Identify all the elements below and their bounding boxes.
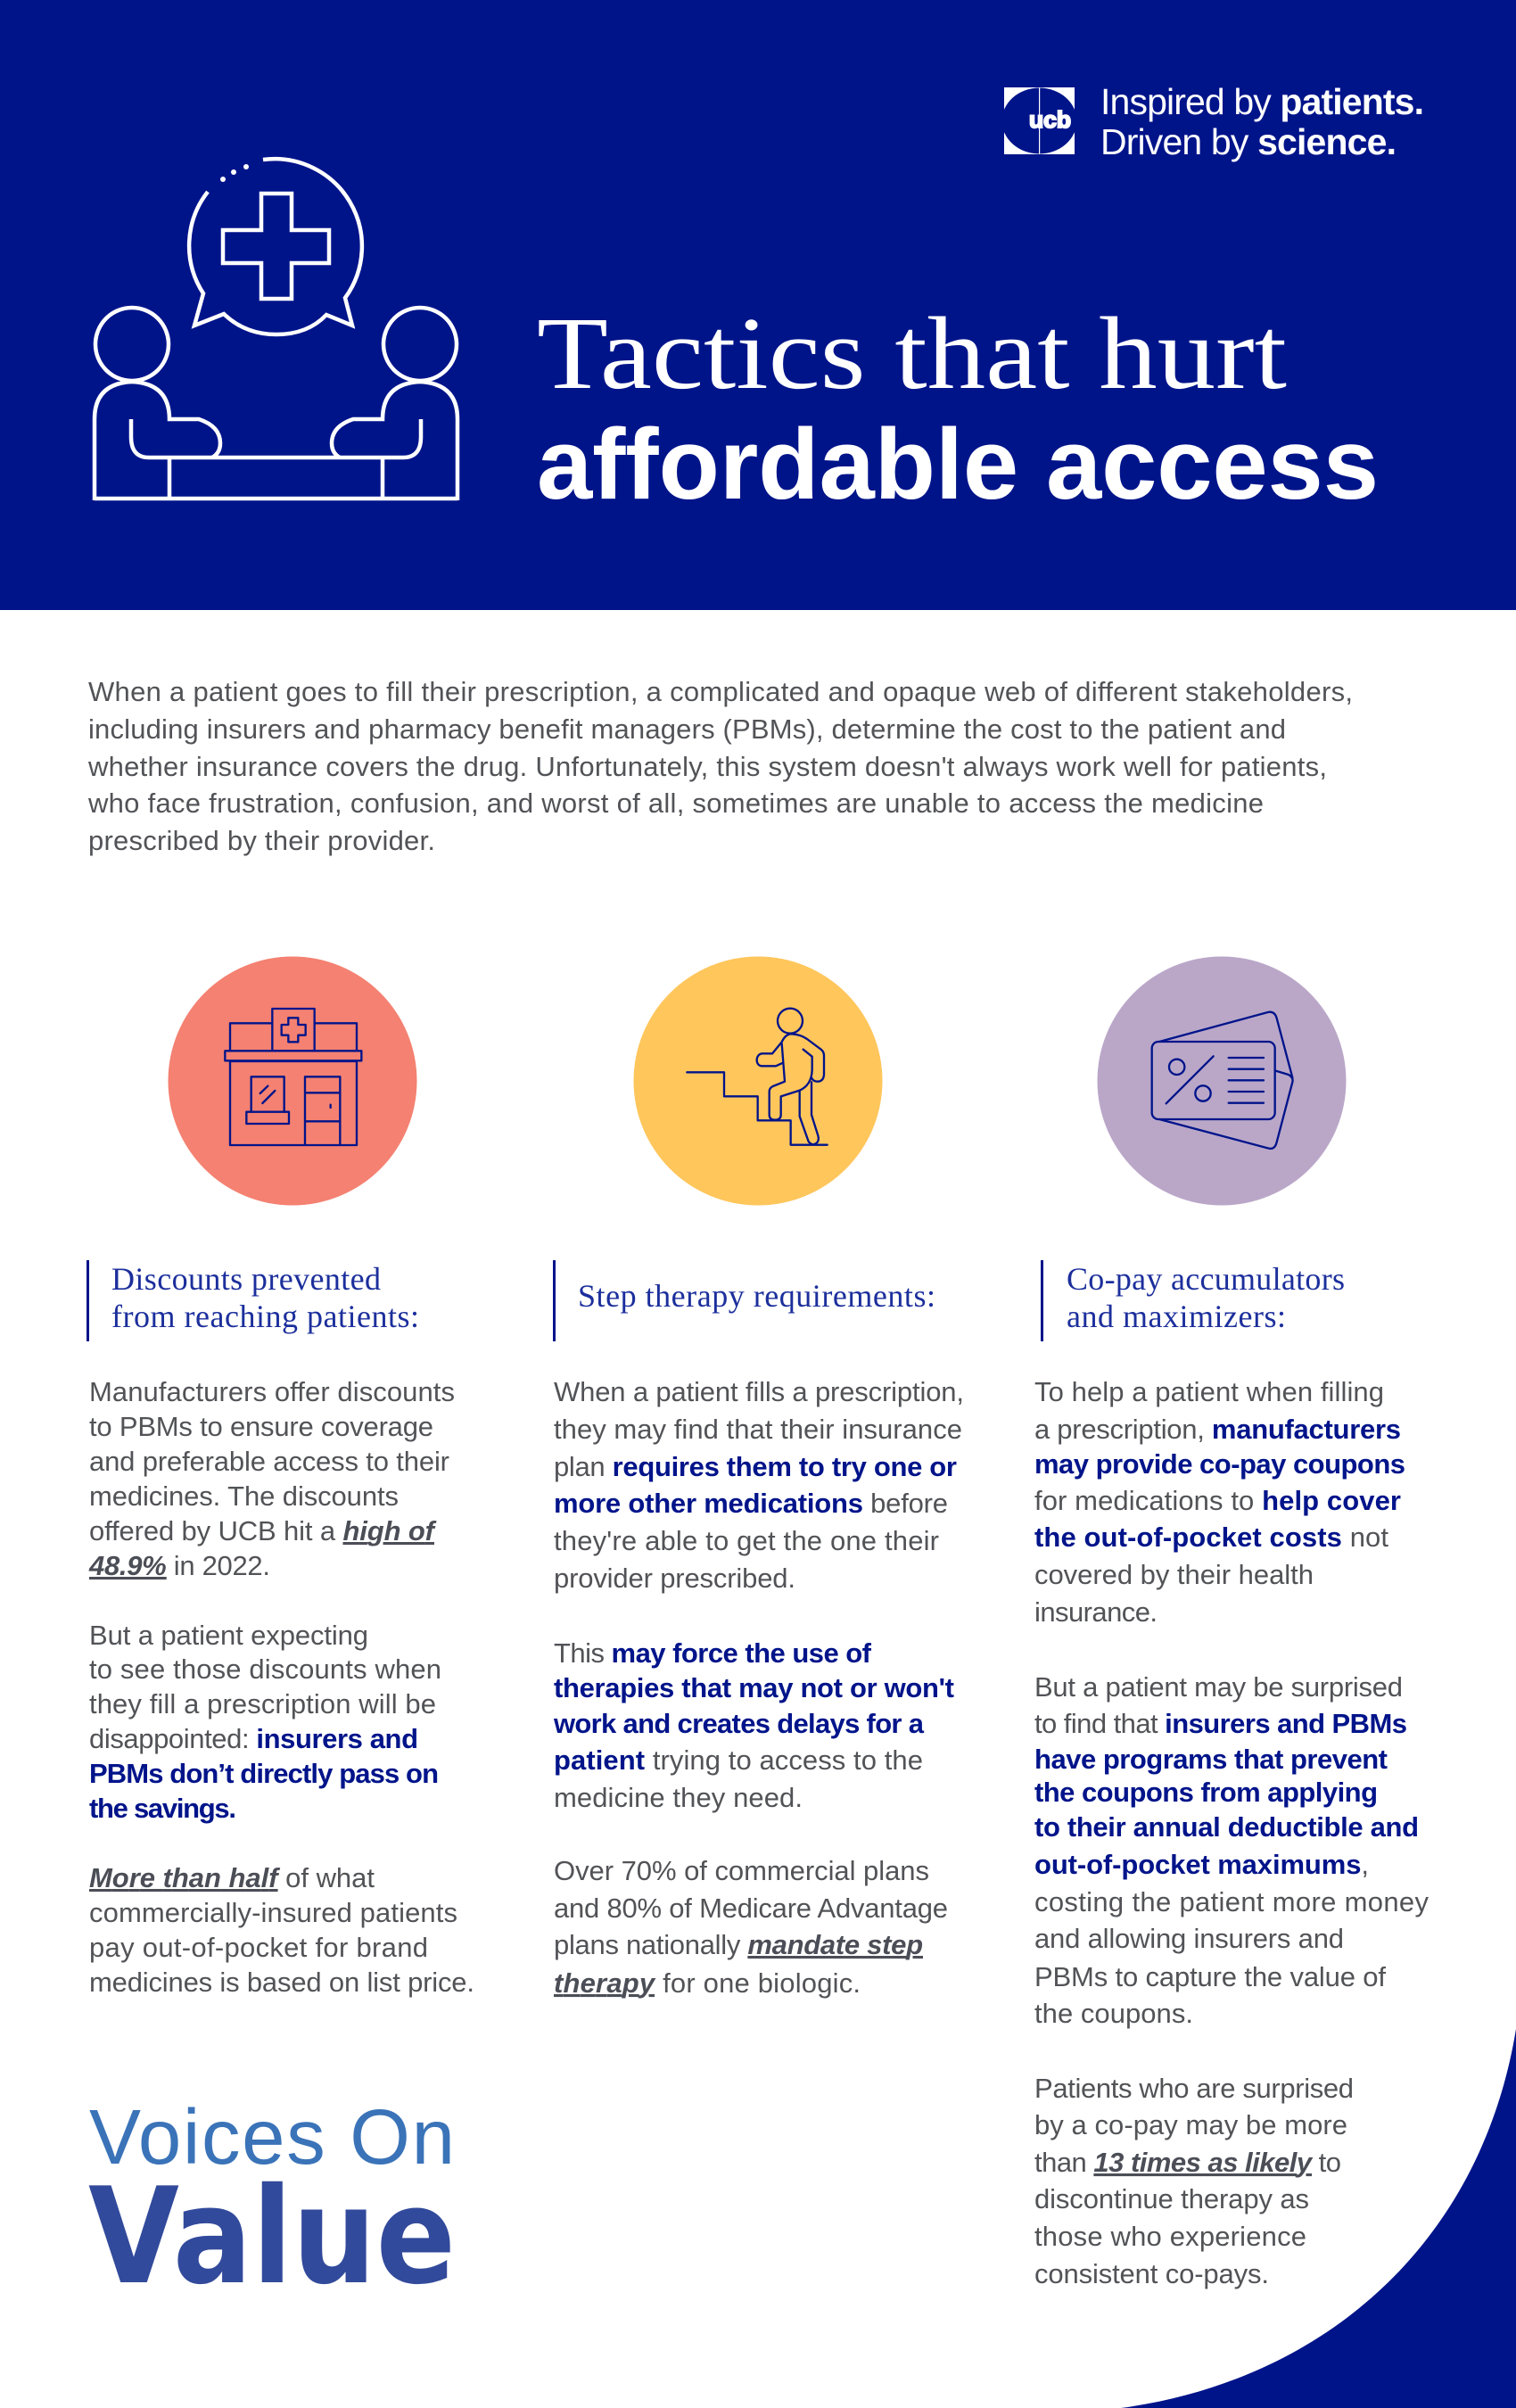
column 2 text: step therapy: therapies that may not or won't <box>554 1672 954 1703</box>
column 3 text: co-pay accumulators: and allowing insurers and <box>1034 1923 1344 1954</box>
column 3 text: co-pay accumulators: have programs that prevent <box>1034 1744 1388 1775</box>
column 2 text: step therapy: they're able to get the one their <box>554 1525 939 1556</box>
column 3 text: co-pay accumulators: by a co-pay may be more <box>1034 2109 1347 2140</box>
column 1 text: discounts: pay out-of-pocket for brand <box>89 1932 428 1963</box>
logo: UCB <box>1002 87 1077 154</box>
column 1 text: discounts: disappointed: insurers and <box>89 1723 418 1754</box>
tagline <box>1100 81 1424 162</box>
column 2 text: step therapy: therapy for one biologic. <box>554 1967 861 1999</box>
column 1 text: discounts <box>88 1376 474 1998</box>
title <box>537 297 1379 520</box>
column 2 text: step therapy: they may find that their insurance <box>554 1414 962 1445</box>
column 3 text: co-pay accumulators: to their annual deductible and <box>1034 1811 1419 1843</box>
icon: pharmacy on coral circle <box>168 956 417 1206</box>
column 3 text: co-pay accumulators: may provide co-pay coupons <box>1034 1448 1405 1480</box>
intro paragraph <box>87 676 1353 856</box>
column 2 text: step therapy: plans nationally mandate step <box>554 1929 923 1960</box>
column 1 text: discounts: and preferable access to their <box>89 1446 449 1477</box>
intro paragraph: including insurers and pharmacy benefit managers (PBMs), determine the cost to the patient and <box>88 713 1286 745</box>
column 3 text: co-pay accumulators: those who experience <box>1034 2221 1306 2252</box>
column 3 text: co-pay accumulators: the coupons from applying <box>1034 1777 1378 1808</box>
column 2 text: step therapy: work and creates delays for a <box>553 1708 925 1739</box>
column 1 heading: Discounts prevented <box>111 1261 381 1297</box>
column 3 text: co-pay accumulators: costing the patient more money <box>1034 1886 1429 1917</box>
title: affordable access <box>537 408 1379 520</box>
column 1 text: discounts: to PBMs to ensure coverage <box>89 1411 433 1442</box>
logo: Voices On Value <box>88 2094 456 2314</box>
logo: Voices On Value: Value <box>88 2160 456 2314</box>
tagline: Driven by science. <box>1100 121 1397 162</box>
column 1 text: discounts: PBMs don’t directly pass on <box>89 1758 439 1789</box>
column 3 text: co-pay accumulators: Patients who are surprised <box>1034 2073 1354 2104</box>
column 2 heading <box>553 1260 935 1341</box>
column 3 text: co-pay accumulators: a prescription, manufacturers <box>1034 1414 1401 1445</box>
column 3 text: co-pay accumulators: the out-of-pocket costs not <box>1034 1521 1388 1553</box>
column 2 text: step therapy: more other medications before <box>554 1488 948 1519</box>
tagline: Inspired by patients. <box>1100 81 1424 122</box>
logo: Voices On Value: Voices On <box>89 2094 455 2181</box>
intro paragraph: whether insurance covers the drug. Unfortunately, this system doesn't always work well for patients, <box>87 751 1327 782</box>
column 1 text: discounts: medicines is based on list price. <box>89 1967 474 1998</box>
column 1 text: discounts: medicines. The discounts <box>89 1480 399 1512</box>
column 2 text: step therapy: This may force the use of <box>554 1637 872 1669</box>
bottom-right corner curve <box>1121 2029 1516 2408</box>
column 3 text: co-pay accumulators: insurance. <box>1034 1596 1158 1628</box>
logo: UCB: ucb <box>1029 106 1071 133</box>
column 3 heading: Co-pay accumulators <box>1067 1261 1345 1297</box>
icon: person climbing stairs on yellow circle <box>633 956 883 1206</box>
column 1 text: discounts: they fill a prescription will be <box>89 1688 436 1719</box>
column 2 text: step therapy: plan requires them to try one or <box>554 1451 957 1482</box>
intro paragraph: who face frustration, confusion, and worst of all, sometimes are unable to access the medicine <box>87 788 1264 819</box>
column 3 text: co-pay accumulators: the coupons. <box>1034 1998 1193 2029</box>
column 3 heading: and maximizers: <box>1067 1299 1286 1334</box>
column 3 text: co-pay accumulators: covered by their health <box>1034 1559 1314 1590</box>
column 3 text: co-pay accumulators: To help a patient when filling <box>1034 1376 1384 1407</box>
icon: coupon cards with percent sign on purple circle <box>1097 956 1347 1206</box>
column 1 text: discounts: More than half of what <box>89 1862 375 1893</box>
column 3 text: co-pay accumulators: for medications to help cover <box>1034 1485 1401 1516</box>
icon: two people talking with medical cross speech bubble <box>95 159 457 500</box>
column 2 text: step therapy: patient trying to access to the <box>554 1744 923 1776</box>
column 3 text: co-pay accumulators: PBMs to capture the value of <box>1034 1961 1386 1992</box>
column 3 text: co-pay accumulators: consistent co-pays. <box>1034 2258 1269 2289</box>
column 2 text: step therapy <box>553 1376 964 1999</box>
column 2 text: step therapy: and 80% of Medicare Advantage <box>554 1893 948 1924</box>
column 1 text: discounts: commercially-insured patients <box>89 1897 457 1928</box>
column 2 text: step therapy: medicine they need. <box>554 1782 803 1813</box>
header band <box>0 0 1516 610</box>
column 1 text: discounts: to see those discounts when <box>89 1653 441 1685</box>
intro paragraph: prescribed by their provider. <box>88 825 435 856</box>
column 1 text: discounts: But a patient expecting <box>89 1620 368 1651</box>
column 3 heading <box>1041 1260 1345 1341</box>
column 3 text: co-pay accumulators <box>1034 1376 1429 2289</box>
column 3 text: co-pay accumulators: to find that insurers and PBMs <box>1034 1708 1407 1739</box>
column 3 text: co-pay accumulators: out-of-pocket maximums, <box>1034 1849 1369 1880</box>
column 2 heading: Step therapy requirements: <box>578 1278 935 1314</box>
intro paragraph: When a patient goes to fill their prescription, a complicated and opaque web of different stakeholders, <box>88 676 1353 707</box>
column 1 text: discounts: the savings. <box>89 1793 236 1824</box>
column 1 text: discounts: Manufacturers offer discounts <box>89 1376 455 1407</box>
column 3 text: co-pay accumulators: than 13 times as likely to <box>1034 2147 1341 2178</box>
column 1 heading <box>87 1260 419 1341</box>
column 1 text: discounts: offered by UCB hit a high of <box>89 1515 437 1546</box>
column 2 text: step therapy: When a patient fills a prescription, <box>554 1376 964 1407</box>
column 3 text: co-pay accumulators: discontinue therapy as <box>1034 2183 1309 2214</box>
title: Tactics that hurt <box>537 297 1287 411</box>
column 2 text: step therapy: Over 70% of commercial plans <box>554 1855 929 1886</box>
column 3 text: co-pay accumulators: But a patient may be surprised <box>1034 1671 1403 1703</box>
column 2 text: step therapy: provider prescribed. <box>554 1563 795 1594</box>
column 1 heading: from reaching patients: <box>111 1299 419 1334</box>
column 1 text: discounts: 48.9% in 2022. <box>88 1550 270 1581</box>
